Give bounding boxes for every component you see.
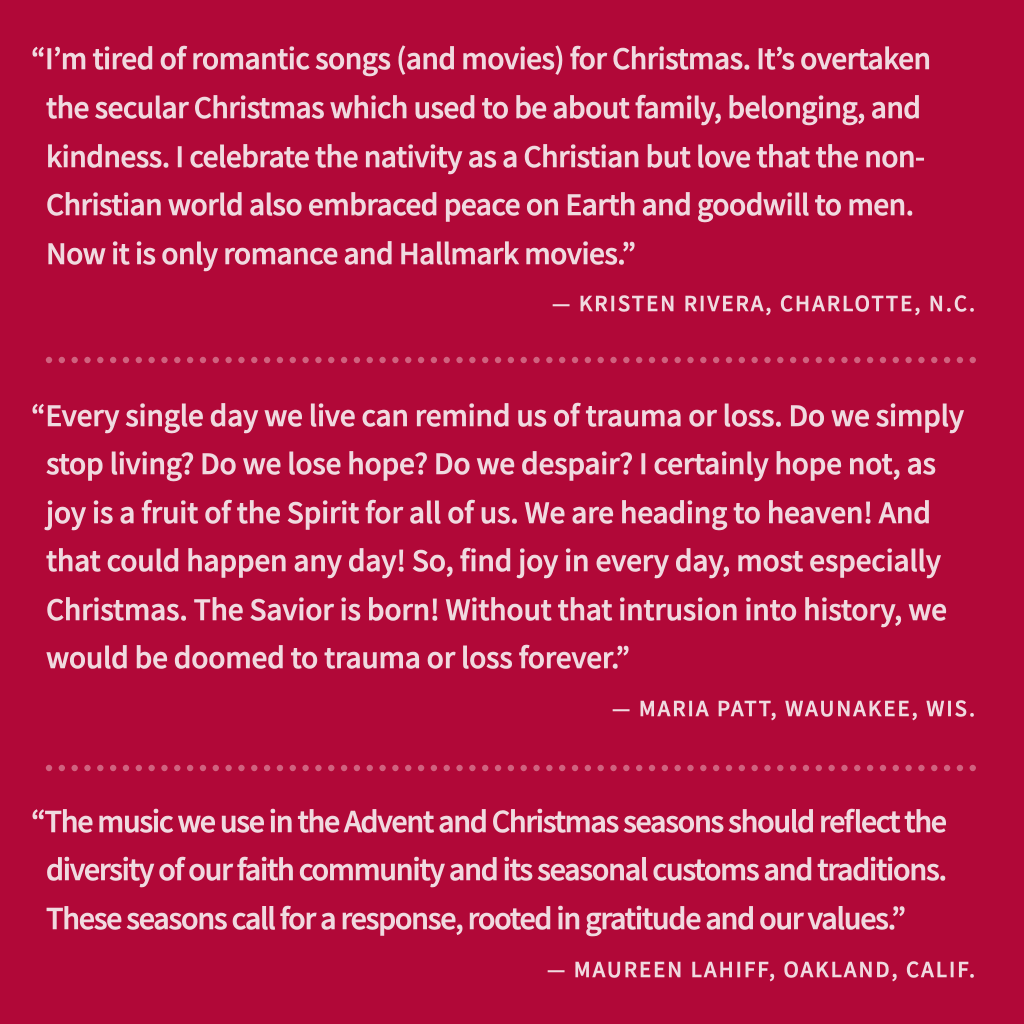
dotted divider 1	[49, 357, 974, 363]
quote 3: These seasons call for a response, rooted in gratitude and our values.”	[46, 897, 906, 938]
dotted divider 2	[49, 765, 974, 771]
quote 2: stop living? Do we lose hope? Do we despair? I certainly hope not, as	[46, 442, 936, 483]
quote 2: Christmas. The Savior is born! Without that intrusion into history, we	[46, 588, 947, 629]
quote 2	[31, 394, 964, 677]
quote 2: joy is a fruit of the Spirit for all of us. We are heading to heaven! And	[44, 491, 931, 532]
quote 3: “The music we use in the Advent and Christmas seasons should reflect the	[31, 800, 947, 841]
quote 1: kindness. I celebrate the nativity as a Christian but love that the non-	[46, 135, 925, 176]
quote 2: would be doomed to trauma or loss forever.”	[46, 636, 630, 677]
quote 1	[31, 37, 931, 273]
quote 2: that could happen any day! So, find joy in every day, most especially	[46, 539, 941, 580]
attribution 1: — KRISTEN RIVERA, CHARLOTTE, N.C.	[552, 287, 975, 317]
quote 1: “I’m tired of romantic songs (and movies) for Christmas. It’s overtaken	[31, 37, 931, 78]
quote 3	[31, 800, 947, 938]
quote 1: Christian world also embraced peace on Earth and goodwill to men.	[46, 183, 914, 224]
quote 1: the secular Christmas which used to be about family, belonging, and	[46, 86, 921, 127]
attribution 2: — MARIA PATT, WAUNAKEE, WIS.	[612, 692, 975, 722]
quote 1: Now it is only romance and Hallmark movies.”	[46, 232, 636, 273]
quote 3: diversity of our faith community and its seasonal customs and traditions.	[46, 848, 947, 889]
attribution 3: — MAUREEN LAHIFF, OAKLAND, CALIF.	[547, 953, 975, 983]
quote 2: “Every single day we live can remind us of trauma or loss. Do we simply	[31, 394, 964, 435]
